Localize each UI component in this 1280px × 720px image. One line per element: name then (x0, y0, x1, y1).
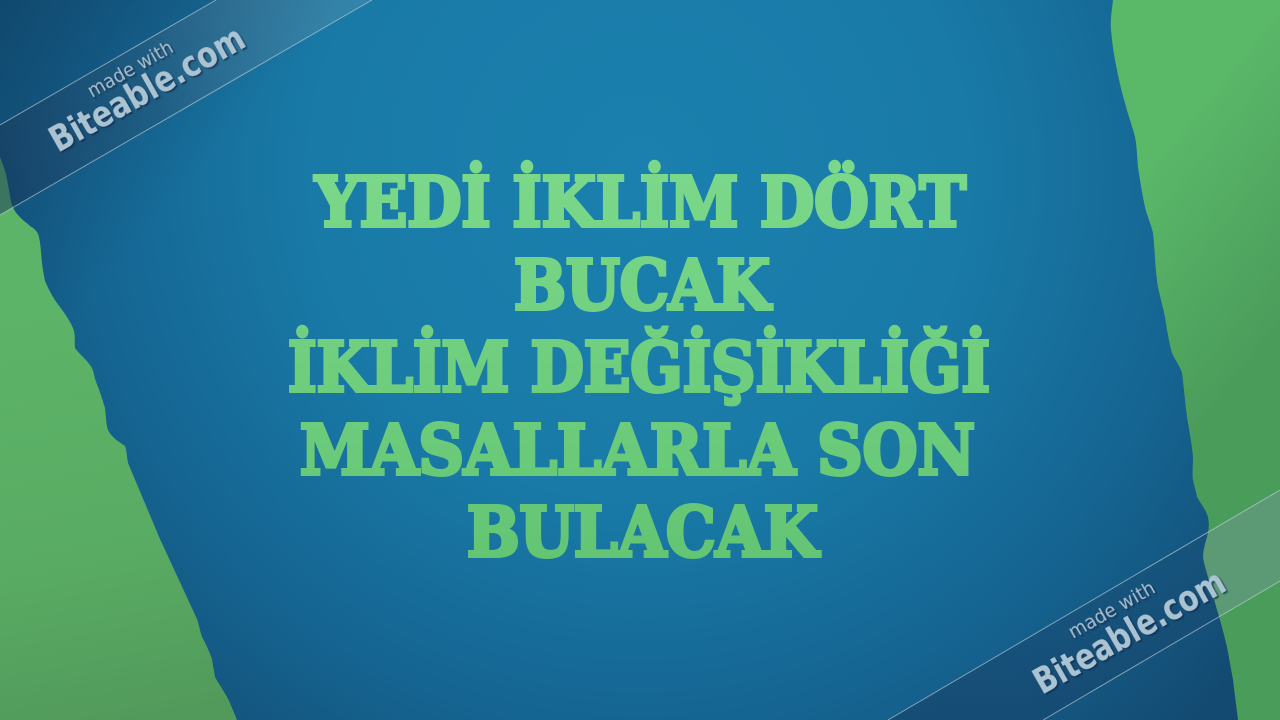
title line 2: BUCAK (514, 246, 772, 326)
watermark text: Biteable.com: Biteable.com (1026, 562, 1233, 703)
heading: main title (288, 161, 990, 573)
watermark band: bottom right (888, 490, 1280, 720)
watermark text: made with: made with (1065, 577, 1159, 643)
title line 5: BULACAK (467, 493, 820, 573)
panel: right green torn edge (1111, 0, 1280, 720)
watermark band: top left (0, 0, 372, 215)
watermark text: made with: made with (84, 36, 177, 102)
title line 3: İKLİM DEĞİŞİKLİĞİ (288, 326, 990, 408)
title line 4: MASALLARLA SON (300, 411, 975, 491)
panel: left green torn edge (0, 157, 237, 720)
title line 1: YEDİ İKLİM DÖRT (314, 161, 966, 243)
